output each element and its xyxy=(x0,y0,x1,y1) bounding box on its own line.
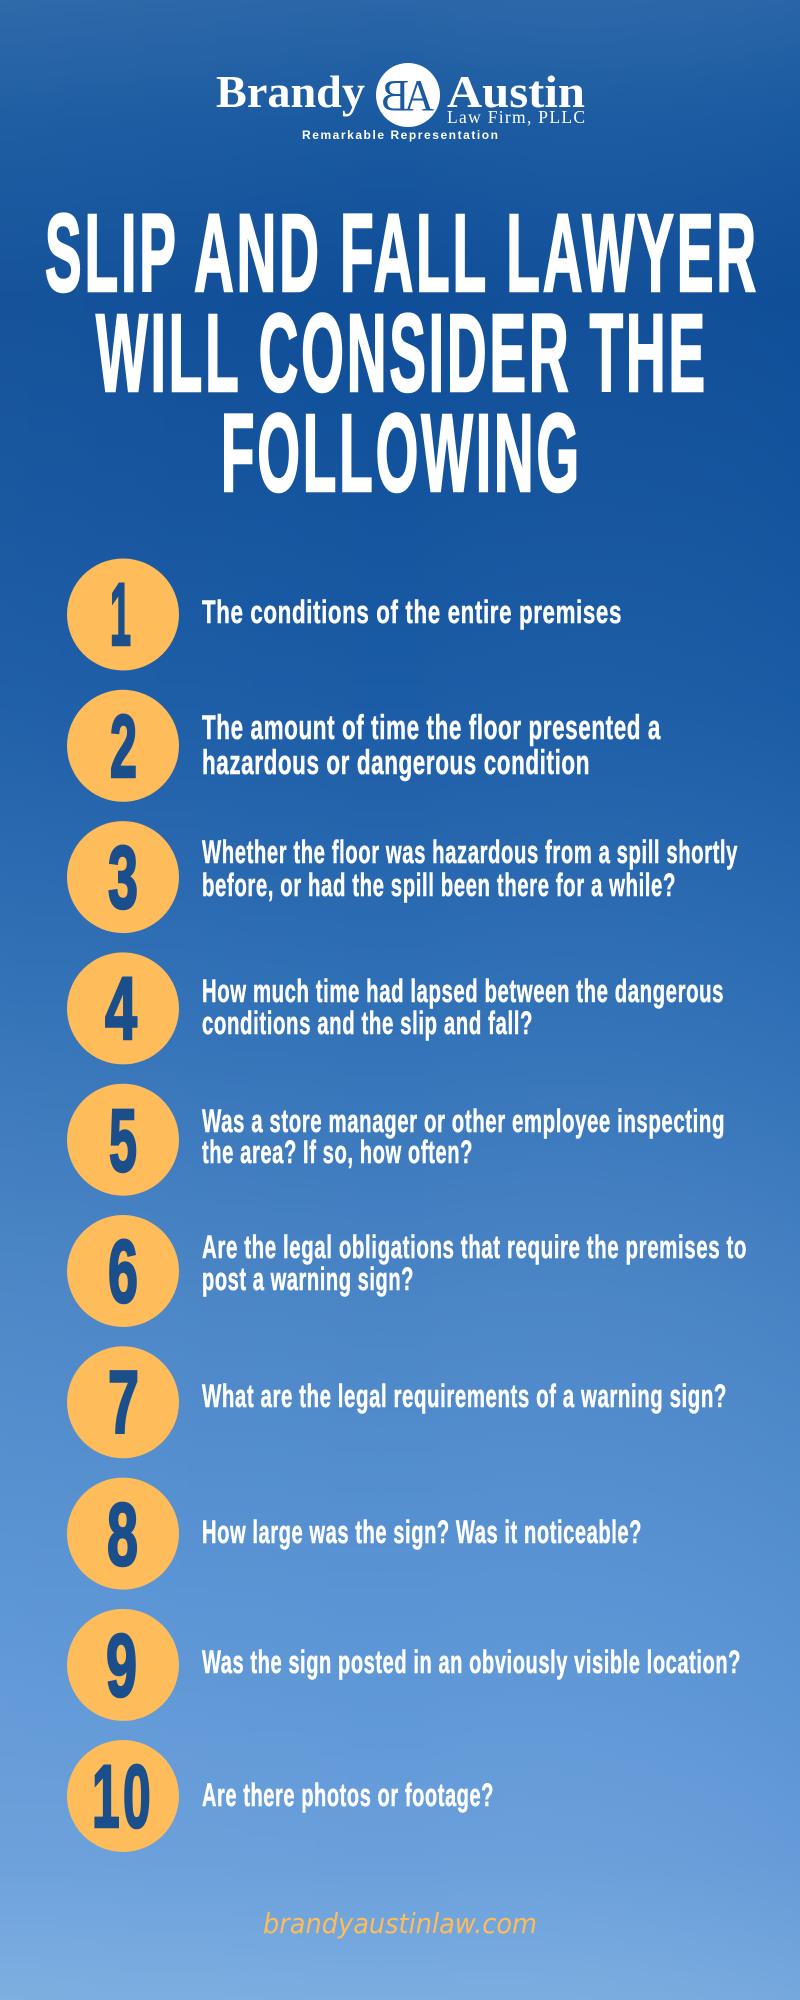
item 10 text: Are there photos or footage? xyxy=(202,1777,494,1813)
number badge 9: 9 xyxy=(106,1615,137,1715)
list item 5 xyxy=(67,1084,725,1196)
number badge 2: 2 xyxy=(110,696,137,796)
list item 9 xyxy=(67,1609,741,1721)
number badge 5: 5 xyxy=(109,1090,137,1190)
logo wordmark Austin: Austin xyxy=(447,66,585,117)
number badge 1 xyxy=(67,558,179,670)
list item 1 xyxy=(67,558,622,670)
item 6 text xyxy=(202,1229,747,1297)
list item 8 xyxy=(67,1478,642,1590)
number badge 5 xyxy=(67,1084,179,1196)
footer website: brandyaustinlaw.com xyxy=(263,1907,537,1940)
item 5 text xyxy=(202,1103,725,1170)
item 1 text: The conditions of the entire premises xyxy=(202,594,622,630)
number badge 2 xyxy=(67,690,179,802)
number badge 4: 4 xyxy=(105,958,137,1058)
title xyxy=(45,192,759,515)
logo emblem BA circle xyxy=(376,63,440,127)
number badge 9 xyxy=(67,1609,179,1721)
number badge 6 xyxy=(67,1215,179,1327)
number badge 10: 10 xyxy=(92,1746,154,1846)
item 6 text: post a warning sign? xyxy=(202,1261,414,1297)
number badge 3: 3 xyxy=(108,827,138,927)
number badge 1: 1 xyxy=(110,564,131,664)
number badge 8 xyxy=(67,1478,179,1590)
list item 6 xyxy=(67,1215,747,1327)
item 2 text xyxy=(202,709,661,782)
number badge 10 xyxy=(67,1740,179,1852)
list item 7 xyxy=(67,1346,727,1458)
list item 2 xyxy=(67,690,661,802)
number badge 6: 6 xyxy=(108,1221,138,1321)
list item 4 xyxy=(67,952,724,1064)
list item 3 xyxy=(67,821,738,933)
item 3 text xyxy=(202,834,738,903)
logo wordmark Brandy: Brandy xyxy=(216,66,365,117)
list item 10 xyxy=(67,1740,494,1852)
number badge 8: 8 xyxy=(107,1484,138,1584)
item 5 text: the area? If so, how often? xyxy=(202,1134,473,1170)
number badge 7 xyxy=(67,1346,179,1458)
number badge 7: 7 xyxy=(108,1352,139,1452)
logo tagline: Remarkable Representation xyxy=(302,128,498,142)
item 4 text: conditions and the slip and fall? xyxy=(202,1005,533,1041)
item 2 text: hazardous or dangerous condition xyxy=(202,744,590,782)
item 4 text xyxy=(202,973,724,1041)
logo emblem BA circle: B xyxy=(381,71,409,120)
number badge 4 xyxy=(67,952,179,1064)
logo emblem BA circle: A xyxy=(404,71,434,120)
logo subtitle Law Firm, PLLC: Law Firm, PLLC xyxy=(447,107,585,127)
number badge 3 xyxy=(67,821,179,933)
logo: Brandy Austin Law Firm xyxy=(216,63,585,142)
